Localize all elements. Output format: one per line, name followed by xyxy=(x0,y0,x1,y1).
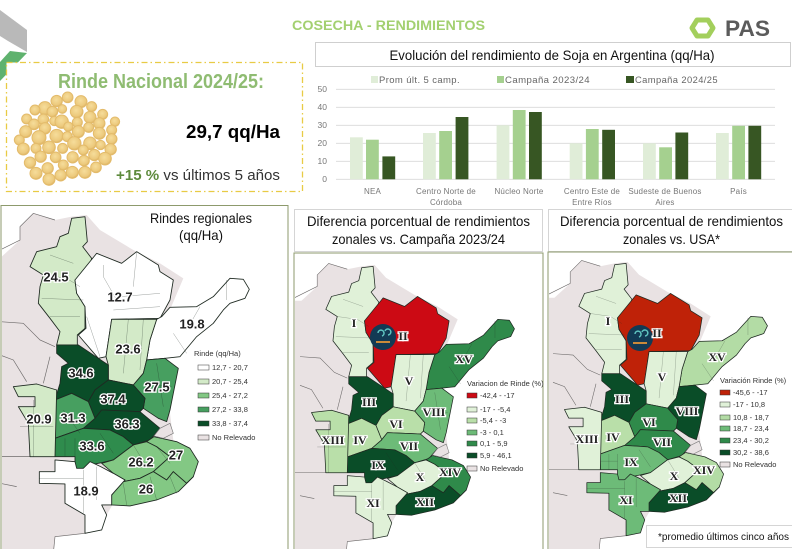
zone labels: XI xyxy=(366,496,380,510)
heading: rindes regionales: Rindes regionales xyxy=(150,210,252,226)
legend: variación de rinde: -17 - -5,4 xyxy=(480,405,510,414)
y axis labels: 10 xyxy=(318,156,327,166)
zone labels: XIV xyxy=(439,465,461,479)
icon: badge xyxy=(370,324,396,350)
map: vs campaña xyxy=(289,263,514,549)
legend: rinde: 33,8 - 37,4 xyxy=(212,419,248,428)
chart legend: Campaña 2023/24 xyxy=(505,75,590,86)
legend: variación de rinde: Variacion de Rinde (%) xyxy=(467,379,544,388)
heading: rinde nacional: Rinde Nacional 2024/25: xyxy=(58,71,264,93)
comparison text: +15 % vs últimos 5 años xyxy=(116,167,280,184)
map labels: 12.7 xyxy=(107,290,133,304)
zone labels: III xyxy=(615,392,629,406)
legend: rinde: 20,7 - 25,4 xyxy=(212,377,248,386)
zone labels: X xyxy=(416,470,425,484)
category labels: Entre Ríos xyxy=(572,198,612,207)
zone labels: IV xyxy=(353,433,367,447)
zone labels: XIII xyxy=(576,432,599,446)
zone labels: VI xyxy=(642,415,656,429)
legend: variación rinde: 30,2 - 38,6 xyxy=(733,448,769,457)
footnote: *promedio últimos cinco años xyxy=(658,531,789,543)
heading: rindes regionales xyxy=(150,210,252,243)
y axis labels: 40 xyxy=(318,102,327,112)
zone labels: XIII xyxy=(322,433,345,447)
bar chart xyxy=(318,75,775,207)
y axis labels: 0 xyxy=(322,174,327,184)
y axis labels: 50 xyxy=(318,84,327,94)
legend: rinde xyxy=(194,349,255,442)
category labels: Centro Este de xyxy=(564,187,620,196)
zone labels: II xyxy=(652,326,662,340)
panel: bar chart heading xyxy=(316,42,790,66)
legend: rinde: 27,2 - 33,8 xyxy=(212,405,248,414)
heading: vs USA: zonales vs. USA* xyxy=(623,231,720,247)
zone labels: I xyxy=(606,314,611,328)
category labels: Centro Norte de xyxy=(416,187,476,196)
map labels: 37.4 xyxy=(100,392,126,406)
map labels xyxy=(26,270,205,498)
legend: variación rinde: -45,6 - -17 xyxy=(733,388,768,397)
legend: variación rinde: No Relevado xyxy=(733,460,776,469)
logo: PAS: PAS xyxy=(725,16,770,41)
zone labels: VII xyxy=(400,439,418,453)
zone labels: IV xyxy=(606,430,620,444)
national yield value: 29,7 qq/Ha xyxy=(186,122,281,142)
zone labels: XII xyxy=(416,495,434,509)
legend: rinde: No Relevado xyxy=(212,433,255,442)
zone labels: XV xyxy=(455,352,473,366)
legend: variación rinde xyxy=(720,376,787,469)
zone labels: I xyxy=(352,316,357,330)
category labels: País xyxy=(730,187,747,196)
chart legend: Prom últ. 5 camp. xyxy=(379,75,460,86)
category labels xyxy=(364,187,747,207)
zone labels: VI xyxy=(389,417,403,431)
zone labels: XV xyxy=(708,350,726,364)
legend: variación de rinde: 5,9 - 46,1 xyxy=(480,451,512,460)
panel: bar chart heading: Evolución del rendimiento de Soja en Argentina (qq/Ha) xyxy=(390,47,714,63)
map labels: 26.2 xyxy=(128,454,154,470)
bars xyxy=(350,110,761,179)
map labels: 23.6 xyxy=(115,342,141,356)
zone labels: II xyxy=(398,329,408,343)
zone labels: X xyxy=(670,469,679,483)
legend: variación rinde: -17 - 10,8 xyxy=(733,400,765,409)
zone labels: V xyxy=(658,370,667,384)
map labels: 33.6 xyxy=(79,438,105,454)
map labels: 27.5 xyxy=(144,380,170,394)
title: COSECHA - RENDIMIENTOS xyxy=(292,18,485,33)
legend: rinde: 25,4 - 27,2 xyxy=(212,391,248,400)
zone labels: IX xyxy=(371,458,385,472)
zone labels: VIII xyxy=(423,405,446,419)
map labels: 24.5 xyxy=(43,270,69,284)
heading: vs campaña: Diferencia porcentual de rendimientos xyxy=(307,213,530,229)
zone labels: XI xyxy=(619,493,633,507)
legend: variación de rinde: No Relevado xyxy=(480,464,523,473)
panel: rindes regionales xyxy=(0,206,288,549)
map labels: 19.8 xyxy=(179,316,205,332)
legend: variación de rinde: -5,4 - -3 xyxy=(480,416,506,425)
zone labels: III xyxy=(362,395,376,409)
zone labels: IX xyxy=(624,455,638,469)
heading: rindes regionales: (qq/Ha) xyxy=(179,227,223,243)
legend: variación rinde: 23,4 - 30,2 xyxy=(733,436,769,445)
legend: rinde: 12,7 - 20,7 xyxy=(212,363,248,372)
y axis labels: 30 xyxy=(318,120,327,130)
chart legend xyxy=(371,75,718,86)
zone labels: VII xyxy=(653,435,671,449)
y axis labels xyxy=(318,84,327,184)
zone labels: V xyxy=(405,374,414,388)
map: rindes regionales xyxy=(0,213,249,549)
icon: soybeans xyxy=(14,92,120,185)
legend: variación de rinde: 0,1 - 5,9 xyxy=(480,439,508,448)
panel: diferencia vs USA xyxy=(542,252,792,549)
map labels: 18.9 xyxy=(73,484,99,498)
heading: vs campaña: zonales vs. Campaña 2023/24 xyxy=(332,231,505,247)
logo: PAS xyxy=(692,16,770,41)
map labels: 34.6 xyxy=(68,366,94,380)
icon: badge xyxy=(627,325,653,351)
panel: rinde nacional xyxy=(6,62,302,192)
category labels: Sudeste de Buenos xyxy=(628,187,702,196)
chart legend: Campaña 2024/25 xyxy=(635,75,718,86)
panel: diferencia vs campaña 2023/24 xyxy=(289,253,544,549)
zone labels xyxy=(322,316,473,510)
zone labels xyxy=(576,314,726,507)
map labels: 36.3 xyxy=(114,416,140,432)
map labels: 27 xyxy=(169,448,183,462)
map labels: 20.9 xyxy=(26,412,52,426)
heading: vs USA xyxy=(548,210,792,252)
zone labels: XII xyxy=(669,491,687,505)
heading: vs campaña xyxy=(294,210,542,252)
legend: variación rinde: 18,7 - 23,4 xyxy=(733,424,769,433)
category labels: NEA xyxy=(364,187,381,196)
legend: variación de rinde: -42,4 - -17 xyxy=(480,391,515,400)
legend: variación de rinde xyxy=(467,379,544,473)
footnote xyxy=(646,526,792,548)
zone labels: XIV xyxy=(693,463,715,477)
map labels: 26 xyxy=(139,482,153,496)
heading: vs USA: Diferencia porcentual de rendimientos xyxy=(560,213,783,229)
map: vs USA xyxy=(542,260,767,549)
y axis labels: 20 xyxy=(318,138,327,148)
zone labels: VIII xyxy=(676,404,699,418)
legend: variación rinde: 10,8 - 18,7 xyxy=(733,413,769,422)
decorative corner logo shape xyxy=(0,10,27,81)
legend: variación de rinde: -3 - 0,1 xyxy=(480,428,504,437)
legend: variación rinde: Variación Rinde (%) xyxy=(720,376,787,385)
legend: rinde: Rinde (qq/Ha) xyxy=(194,349,241,358)
category labels: Aires xyxy=(655,198,675,207)
category labels: Núcleo Norte xyxy=(494,187,544,196)
category labels: Córdoba xyxy=(430,198,462,207)
map labels: 31.3 xyxy=(60,410,86,426)
